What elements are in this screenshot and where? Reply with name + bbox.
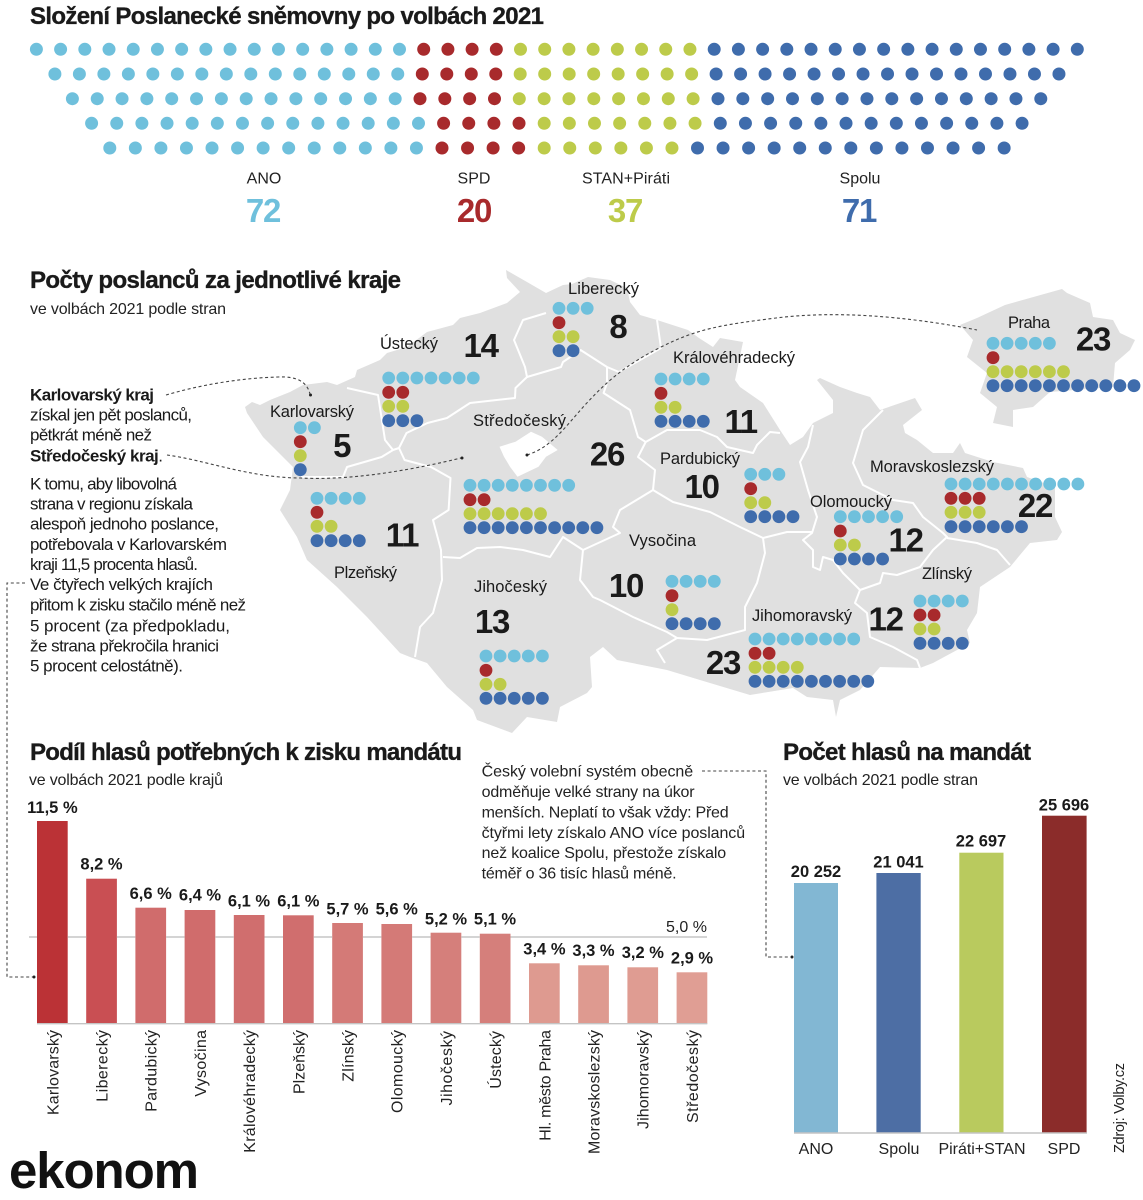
region: Středočeský: 26 [590,436,625,473]
logo: ekonom: ekonom [9,1142,199,1199]
region: Jihomoravský: Jihomoravský [752,607,853,625]
bar chart: votes per seat: 21 041 [873,854,924,872]
region: Pardubický [660,450,793,517]
bar chart: votes per seat: 25 696 [1039,796,1089,814]
heading: votes per seat: ve volbách 2021 podle stran [783,772,978,789]
region: Zlínský [869,565,973,643]
region: Plzeňský: Plzeňský [334,564,398,582]
text block: electoral system note: odměňuje velké strany na úkor [482,784,695,801]
region: Královéhradecký: 11 [724,403,758,440]
value labels: 6,4 % [179,886,221,904]
callout line to vote chart [702,771,794,958]
text block: Karlovarský note: kraji 11,5 procenta hlasů. [30,555,198,574]
region: Olomoucký: Olomoucký [810,493,893,511]
value labels: 6,1 % [277,892,320,910]
text block: Karlovarský note [30,386,246,676]
legend: ANO: ANO [247,170,281,188]
value labels: 11,5 % [27,799,78,817]
region: Karlovarský [270,403,355,470]
bar chart: votes per seat: Piráti+STAN [938,1141,1026,1158]
chart: seat dots by party [36,49,1077,148]
region: Jihomoravský [706,607,868,681]
region: Královéhradecký [661,349,796,440]
value labels: 5,6 % [376,900,418,918]
rotated region labels: Liberecký [94,1030,112,1102]
value labels: 3,2 % [622,944,664,962]
value labels: 5,7 % [326,900,369,918]
legend: ANO: 72 [246,192,281,229]
region: Vysočina [609,532,714,624]
region: Ústecký: Ústecký [380,334,439,353]
bar chart: votes per seat: Spolu [879,1141,919,1158]
text block: Karlovarský note: 5 procent celostátně). [30,657,183,676]
region: Karlovarský: Karlovarský [270,403,355,421]
region: Zlínský: Zlínský [922,565,973,583]
heading: deputies per region [30,267,401,318]
rotated region labels [45,1030,702,1154]
text block: Karlovarský note: přitom k zisku stačilo méně než [30,596,246,615]
region: Ústecký [380,327,500,421]
legend: STAN+Piráti [582,170,670,229]
region: Jihomoravský: 23 [706,644,741,681]
text block: electoral system note: než koalice Spolu, přestože získalo [482,845,726,862]
region: Jihočeský [474,578,548,698]
region: Praha: 23 [1076,321,1111,358]
bar chart: votes per seat: ANO [799,1141,833,1158]
legend: Spolu [840,170,880,229]
region: Vysočina: Vysočina [629,532,697,550]
text block: Karlovarský note: alespoň jednoho poslance, [30,514,219,533]
legend: Spolu: 71 [842,192,877,229]
text block: Karlovarský note: získal jen pět poslanců, [30,406,192,425]
region: Moravskoslezský [870,458,1078,527]
heading: votes per seat [783,739,1031,789]
text block: electoral system note: téměř o 36 tisíc hlasů méně. [482,864,677,882]
map: Prague hole in Středočeský [500,432,558,477]
map: Czech regions [245,270,1135,733]
legend: SPD: 20 [457,192,491,229]
legend: SPD [457,170,491,229]
text block: electoral system note [482,762,745,882]
value labels [27,799,713,968]
map: Prague enlarged [960,289,1135,427]
heading: vote share needed: Podíl hlasů potřebných k zisku mandátu [30,739,462,766]
region: Karlovarský: 5 [333,427,351,464]
rotated region labels: Plzeňský [291,1030,308,1094]
rotated region labels: Pardubický [144,1030,161,1112]
legend: ANO [246,170,281,229]
region: Ústecký: 14 [464,327,500,364]
text block: Karlovarský note: Středočeský kraj. [30,447,163,466]
value labels: 3,4 % [523,940,566,958]
text block: Karlovarský note: 5 procent (za předpokladu, [30,617,230,636]
region: Liberecký [559,280,640,351]
heading: deputies per region: Počty poslanců za jednotlivé kraje [30,267,401,294]
legend: STAN+Piráti: 37 [608,192,642,229]
rotated region labels: Jihočeský [439,1031,456,1106]
region: Zlínský: 12 [869,601,904,638]
value labels: 3,3 % [572,942,615,960]
callout lines [7,315,977,979]
region: Moravskoslezský: 22 [1018,487,1053,524]
region: Plzeňský: 11 [386,517,419,554]
region: Vysočina: 10 [609,567,643,604]
heading: deputies per region: ve volbách 2021 podle stran [30,301,226,318]
region: Olomoucký: 12 [889,522,924,559]
region: Jihočeský: Jihočeský [474,578,548,596]
text block: Karlovarský note: že strana překročila hranici [30,637,219,656]
region: Jihočeský: 13 [475,603,510,640]
heading: vote share needed: ve volbách 2021 podle krajů [29,771,223,789]
region: Olomoucký [810,493,924,559]
legend: STAN+Piráti: STAN+Piráti [582,170,670,188]
rotated region labels: Ústecký [486,1031,505,1089]
rotated region labels: Karlovarský [45,1030,62,1115]
5 % threshold line: 5,0 % [666,919,707,936]
text block: Karlovarský note: Ve čtyřech velkých krajích [30,575,213,594]
text block: Karlovarský note: Karlovarský kraj [30,386,154,405]
heading: votes per seat: Počet hlasů na mandát [783,739,1031,766]
region: Moravskoslezský: Moravskoslezský [870,458,995,476]
bar chart: votes per seat: 22 697 [956,832,1006,850]
source note: Zdroj: Volby.cz [1112,1063,1128,1153]
bars [37,821,707,1024]
rotated region labels: Olomoucký [390,1030,407,1113]
value labels: 5,2 % [425,910,467,928]
legend: Spolu: Spolu [840,170,880,188]
region: Liberecký: Liberecký [568,280,640,298]
value labels: 2,9 % [671,950,713,968]
region: Středočeský: Středočeský [473,412,567,430]
text block: electoral system note: menších. Neplatí to však vždy: Před [482,804,729,822]
region: Středočeský [470,412,625,528]
rotated region labels: Zlínský [340,1030,358,1082]
value labels: 6,6 % [130,885,172,903]
region: Plzeňský [317,498,419,582]
bar chart: votes per seat: 20 252 [791,863,841,881]
value labels: 6,1 % [228,892,270,910]
value labels: 5,1 % [474,910,516,928]
text block: electoral system note: Český volební systém obecně [482,762,693,780]
title: parliament composition: Složení Poslanecké sněmovny po volbách 2021 [30,3,544,30]
region: Pardubický: 10 [685,468,719,505]
text block: Karlovarský note: K tomu, aby libovolná [30,474,178,493]
rotated region labels: Jihomoravský [636,1030,653,1129]
region: Liberecký: 8 [609,308,627,345]
rotated region labels: Hl. město Praha [537,1030,554,1141]
heading: vote share needed [29,739,462,789]
bar chart: votes per seat: SPD [1048,1141,1080,1158]
text block: Karlovarský note: potřebovala v Karlovarském [30,535,227,554]
region: Praha [993,314,1134,386]
rotated region labels: Moravskoslezský [586,1030,604,1154]
text block: electoral system note: čtyřmi lety získalo ANO více poslanců [482,824,745,842]
region: Pardubický: Pardubický [660,450,741,468]
legend: SPD: SPD [458,170,490,188]
bar chart: votes per seat [791,796,1089,1158]
value labels: 8,2 % [80,856,123,874]
region: Královéhradecký: Královéhradecký [673,349,796,367]
rotated region labels: Vysočina [193,1030,210,1097]
region: Praha: Praha [1008,314,1051,332]
text block: Karlovarský note: pětkrát méně než [30,426,152,445]
bar chart: vote share by region [27,799,713,1154]
text block: Karlovarský note: strana v regionu získala [30,494,194,513]
rotated region labels: Královéhradecký [242,1030,259,1153]
rotated region labels: Středočeský [685,1030,702,1123]
map: regional borders [301,313,1010,668]
